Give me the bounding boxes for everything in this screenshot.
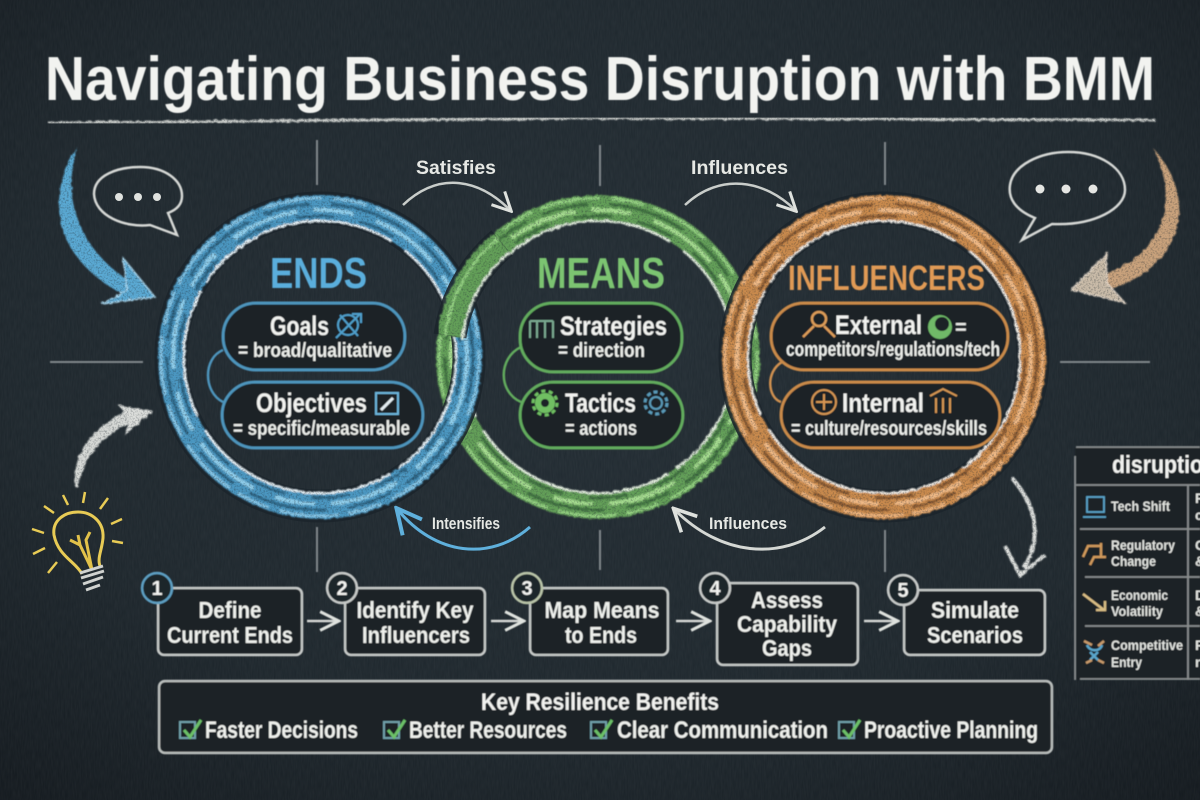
panel: means [504,249,683,448]
pill: external: External [835,310,922,340]
icon: columns [530,321,553,338]
interlock: green over blue at the top crossing [445,238,510,340]
row: regulatory change: Change [1111,553,1156,569]
step 4: Capability [737,611,837,637]
icon: building [930,389,957,413]
heading: means: MEANS [537,249,665,298]
pill: internal: Internal [842,388,924,418]
arrow: satisfies [403,158,510,210]
step 5: 5 [897,580,909,602]
pill: tactics: = actions [565,418,637,440]
icon: person [803,312,835,337]
arrow: satisfies: Satisfies [416,158,496,179]
benefit: faster decisions: Faster Decisions [205,717,358,744]
arrow: intensifies: Intensifies [432,514,500,533]
icon: target [336,314,361,338]
row: tech shift: Tech Shift [1111,498,1170,514]
panel: ends [208,249,423,448]
row: economic volatility: Economic [1111,587,1168,603]
arrow: intensifies [398,510,530,549]
speech bubble right [1010,152,1125,240]
pill: strategies [520,303,682,372]
heading: ends: ENDS [270,249,367,298]
process steps [142,573,1045,665]
step 4: 4 [709,578,721,600]
pill: internal [781,382,1000,448]
pill: strategies: Strategies [560,311,667,341]
icon: filled gear [533,391,557,415]
panel: influencers [770,259,1008,448]
pill: external [771,303,1008,370]
arrow: down to table [1005,478,1045,575]
benefit: clear communication: Clear Communication [617,717,828,744]
pill: objectives: = specific/measurable [233,418,410,440]
row: competitive entry [1084,637,1200,670]
pill: external: = [955,317,967,339]
arrow: influences top: Influences [691,158,788,179]
row: economic volatility: Volatility [1111,603,1163,619]
arrow: blue left [59,147,155,304]
icon: pencil box [376,393,398,414]
table: disruption [1075,447,1200,680]
guide ticks [50,140,1150,572]
pill: tactics: Tactics [565,388,636,418]
pill connector [504,347,521,402]
arrow: influences bottom: Influences [709,514,787,533]
pill: external: competitors/regulations/tech [786,339,1000,361]
step 2: Influencers [362,622,470,648]
step 1 [142,573,302,655]
step 4: Assess [751,587,823,613]
step 5: Scenarios [927,622,1023,648]
pill connector [770,362,782,402]
step 2: Identify Key [356,597,474,623]
icon: lightbulb [32,492,123,590]
row: regulatory change [1083,537,1200,569]
arrow: influences bottom [675,510,825,549]
step 1: Define [198,597,262,623]
arrow: step 3 to 4 [676,620,708,622]
row: tech shift [1083,490,1200,523]
icon: green globe [928,315,952,339]
ring: influencers [725,198,1043,516]
benefit: better resources: Better Resources [409,717,567,744]
arrow: influences top [685,158,795,210]
step 1: Current Ends [167,622,293,648]
benefit: proactive planning: Proactive Planning [864,717,1038,744]
step 3: Map Means [544,597,660,623]
arrow: white to ends [75,405,153,487]
step 5: Simulate [931,597,1019,623]
panel: key resilience benefits [159,681,1052,753]
row: competitive entry: Entry [1111,654,1142,670]
row: competitive entry: Competitive [1111,637,1183,653]
speech bubble left [94,167,182,235]
pill: tactics [520,382,683,448]
step 5 [888,575,1045,655]
pill: strategies: = direction [558,340,645,362]
row: regulatory change: Regulatory [1111,537,1175,553]
step 3: to Ends [565,622,637,648]
row: economic volatility [1083,587,1200,619]
icon: round emblem [812,390,836,414]
arrow: step 4 to 5 [864,620,896,622]
arrow: orange right [1071,148,1179,303]
step 1: 1 [151,578,163,600]
benefits heading: Key Resilience Benefits [481,689,719,716]
step 4: Gaps [762,635,812,661]
pill: goals: Goals [270,311,329,341]
ring: ends [161,198,479,516]
pill: internal: = culture/resources/skills [791,418,987,440]
arrow: step 1 to 2 [307,620,337,622]
pill: goals: = broad/qualitative [238,340,392,362]
pill: objectives [222,382,423,448]
step 2: 2 [336,578,348,600]
pill: goals [223,303,405,370]
step 4 [700,573,858,665]
pill connector [208,350,223,402]
step 2 [327,573,485,655]
pill: objectives: Objectives [256,388,367,418]
step 3 [512,573,668,655]
heading: influencers: INFLUENCERS [788,259,985,298]
step 3: 3 [521,578,533,600]
icon: outline gear [645,392,667,414]
arrow: step 2 to 3 [491,620,522,622]
ring: means [439,198,757,516]
